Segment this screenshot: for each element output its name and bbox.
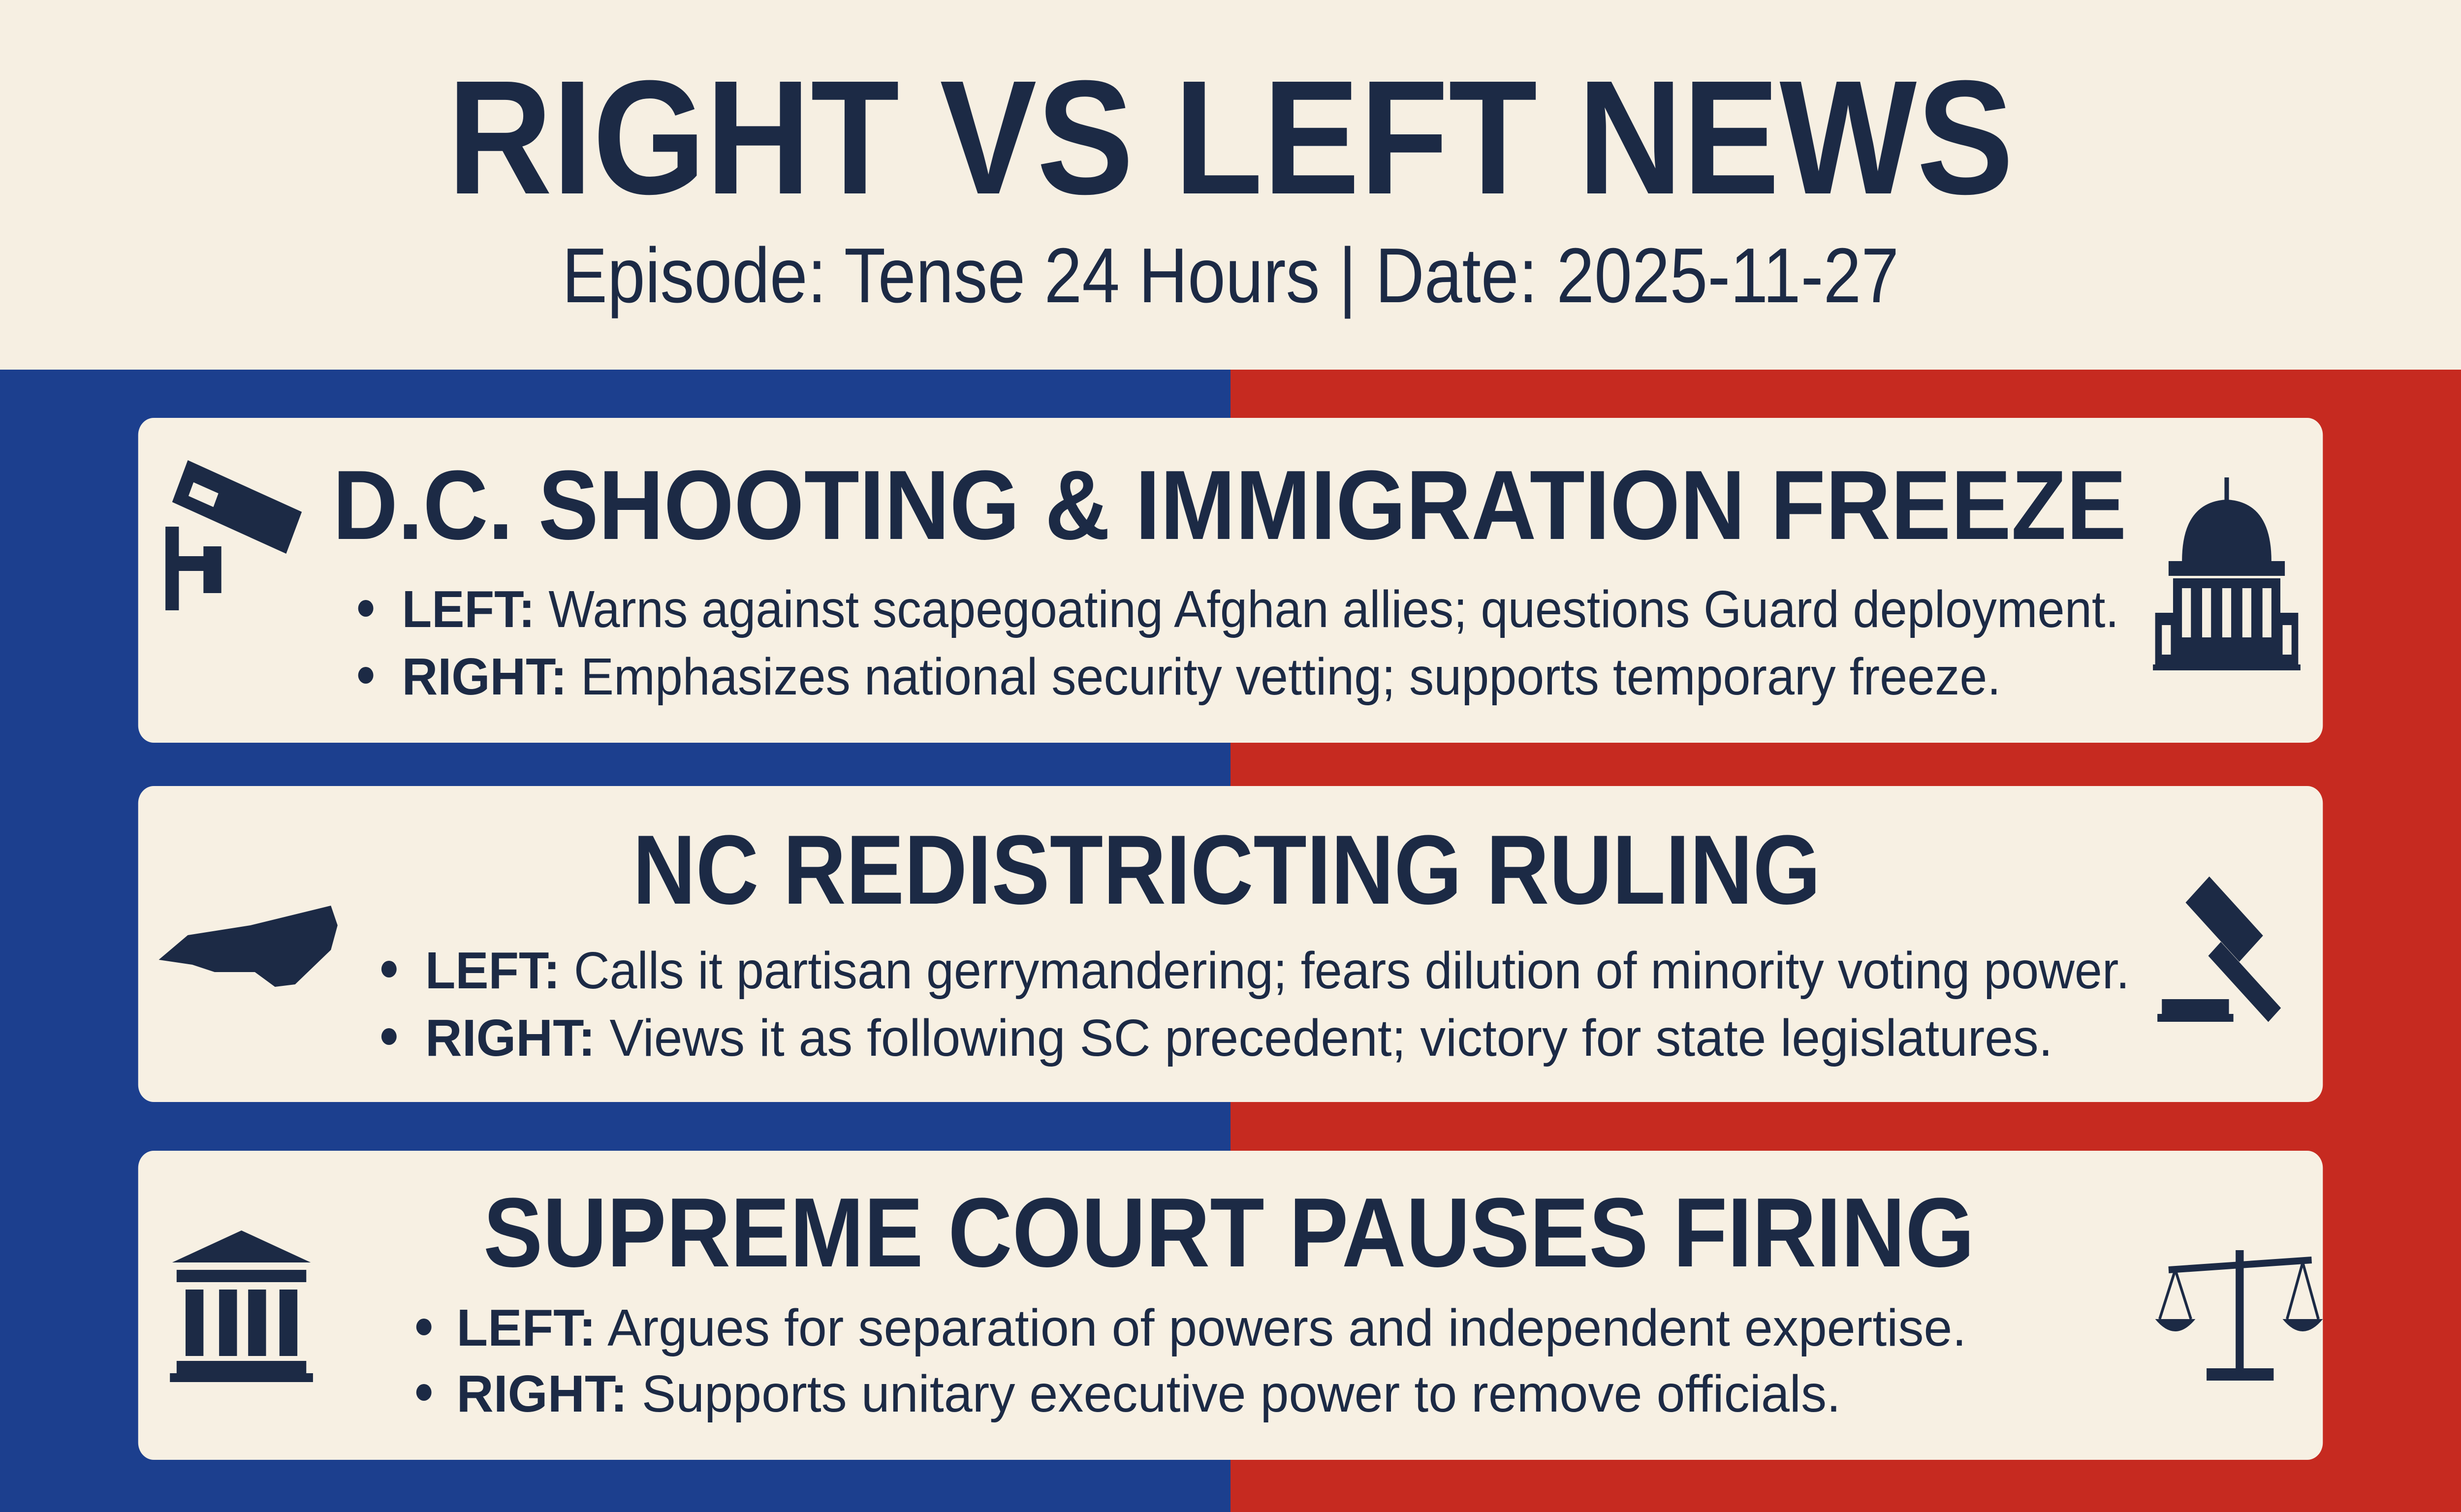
bullets: Supreme Court: LEFT: Argues for separation of powers and independent expertise. <box>457 1299 1966 1357</box>
heading: D.C. shooting: D.C. SHOOTING & IMMIGRATION FREEZE <box>333 450 2126 560</box>
icon: courthouse <box>170 1230 313 1382</box>
panel: NC redistricting <box>138 786 2323 1102</box>
bullets: Supreme Court <box>416 1299 1966 1423</box>
heading: Supreme Court: SUPREME COURT PAUSES FIRING <box>483 1178 1975 1288</box>
bullets: NC redistricting: RIGHT: Views it as following SC precedent; victory for state legislatures. <box>425 1009 2053 1067</box>
panel: Supreme Court <box>138 1151 2323 1460</box>
icon: security camera <box>165 460 302 610</box>
icon: scales <box>2155 1250 2323 1381</box>
bullets: NC redistricting <box>381 942 2130 1067</box>
bullets: NC redistricting: LEFT: Calls it partisan gerrymandering; fears dilution of minority voting power. <box>425 942 2130 1000</box>
subtitle: Episode: Tense 24 Hours | Date: 2025-11-27 <box>562 232 1899 318</box>
bullets: Supreme Court: RIGHT: Supports unitary executive power to remove officials. <box>457 1365 1841 1423</box>
icon: capitol <box>2153 477 2301 670</box>
bullets: D.C. shooting: RIGHT: Emphasizes national security vetting; supports temporary freeze. <box>402 648 2001 706</box>
panel: D.C. shooting <box>138 418 2323 743</box>
heading: NC redistricting: NC REDISTRICTING RULING <box>632 815 1821 925</box>
icon: North Carolina map <box>158 906 338 987</box>
icon: gavel <box>2157 877 2281 1022</box>
title: RIGHT VS LEFT NEWS <box>447 47 2014 228</box>
bullets: D.C. shooting: LEFT: Warns against scapegoating Afghan allies; questions Guard deployment. <box>402 580 2119 638</box>
bullets: D.C. shooting <box>358 580 2119 706</box>
